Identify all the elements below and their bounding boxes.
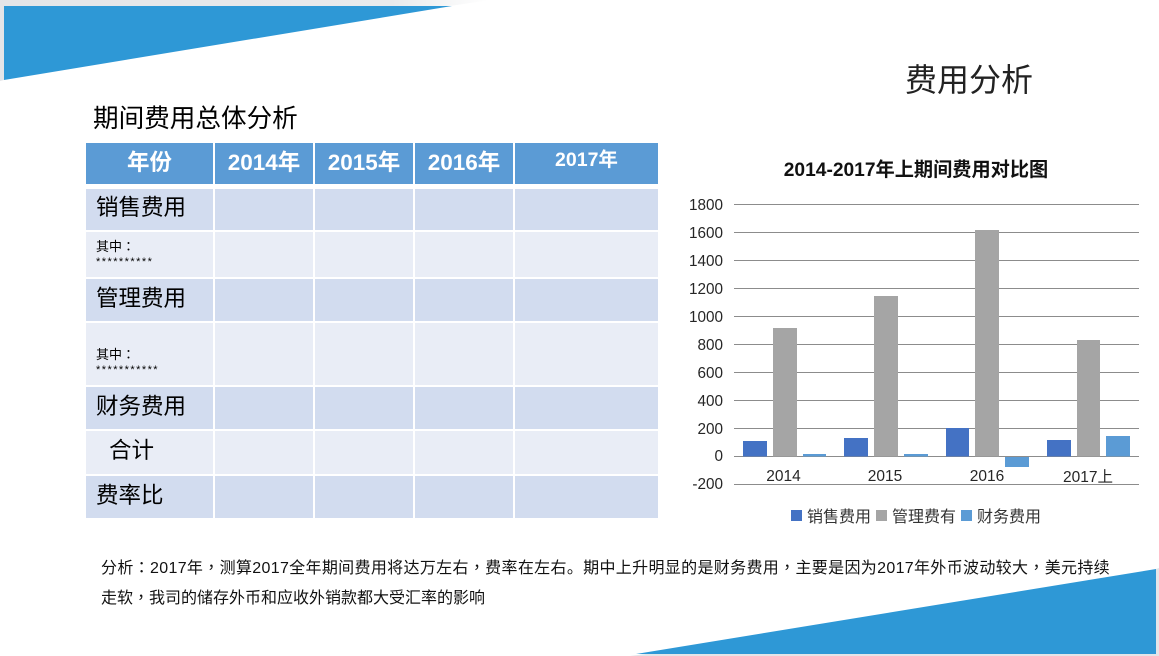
legend: 财务费用 <box>977 508 1041 526</box>
header row: 2014年 <box>228 150 300 175</box>
panel: expense table <box>86 143 658 518</box>
row label: 其中: ********** <box>96 256 153 268</box>
bar chart <box>689 158 1139 526</box>
row label: 其中: *********** <box>96 364 159 376</box>
header row <box>86 143 658 184</box>
header row: 2016年 <box>428 150 500 175</box>
y axis labels: 1200 <box>689 281 723 298</box>
header row: 年份 <box>127 150 172 175</box>
y axis labels: 1400 <box>689 253 723 270</box>
y axis labels: -200 <box>692 476 723 493</box>
row label: 其中 <box>96 236 153 268</box>
row label: 其中: 其中： <box>96 236 135 255</box>
y axis labels: 1000 <box>689 309 723 326</box>
legend: 管理费有 <box>892 508 956 526</box>
table heading: 期间费用总体分析 <box>93 105 298 133</box>
y axis labels: 200 <box>697 421 723 438</box>
y axis labels: 600 <box>697 365 723 382</box>
row label: 合计: 合计 <box>109 438 154 463</box>
y axis labels: 1800 <box>689 197 723 214</box>
analysis text <box>101 554 1110 608</box>
row label: 其中: 其中： <box>96 344 135 363</box>
series: 销售费用 <box>743 428 1071 456</box>
analysis text: 分析：2017年，测算2017全年期间费用将达万左右，费率在左右。期中上升明显的是财务费用，主要是因为2017年外币波动较大，美元持续 <box>101 554 1110 578</box>
y axis labels: 400 <box>697 393 723 410</box>
series: 财务费用 <box>803 436 1130 467</box>
header row: 2015年 <box>328 150 400 175</box>
x axis labels <box>766 468 1113 486</box>
y axis labels <box>689 197 723 493</box>
title: 费用分析 <box>905 62 1033 98</box>
row label: 财务费用: 财务费用 <box>96 394 186 419</box>
x axis labels: 2016 <box>970 468 1004 485</box>
row label: 管理费用: 管理费用 <box>96 286 186 311</box>
series: 管理费有 <box>773 230 1100 456</box>
x axis labels: 2017上 <box>1063 468 1113 486</box>
analysis text: 走软，我司的储存外币和应收外销款都大受汇率的影响 <box>101 584 485 608</box>
header row: 2017年 <box>555 149 618 171</box>
x axis labels: 2015 <box>868 468 902 485</box>
x axis labels: 2014 <box>766 468 801 485</box>
row label: 销售费用: 销售费用 <box>96 195 186 220</box>
y axis labels: 0 <box>714 448 723 465</box>
legend <box>791 508 1041 526</box>
row label: 费率比: 费率比 <box>96 483 164 508</box>
y axis labels: 800 <box>697 337 723 354</box>
legend: 销售费用 <box>807 508 871 526</box>
y axis labels: 1600 <box>689 225 723 242</box>
chart title: 2014-2017年上期间费用对比图 <box>784 158 1048 181</box>
row label: 其中 <box>96 344 159 376</box>
